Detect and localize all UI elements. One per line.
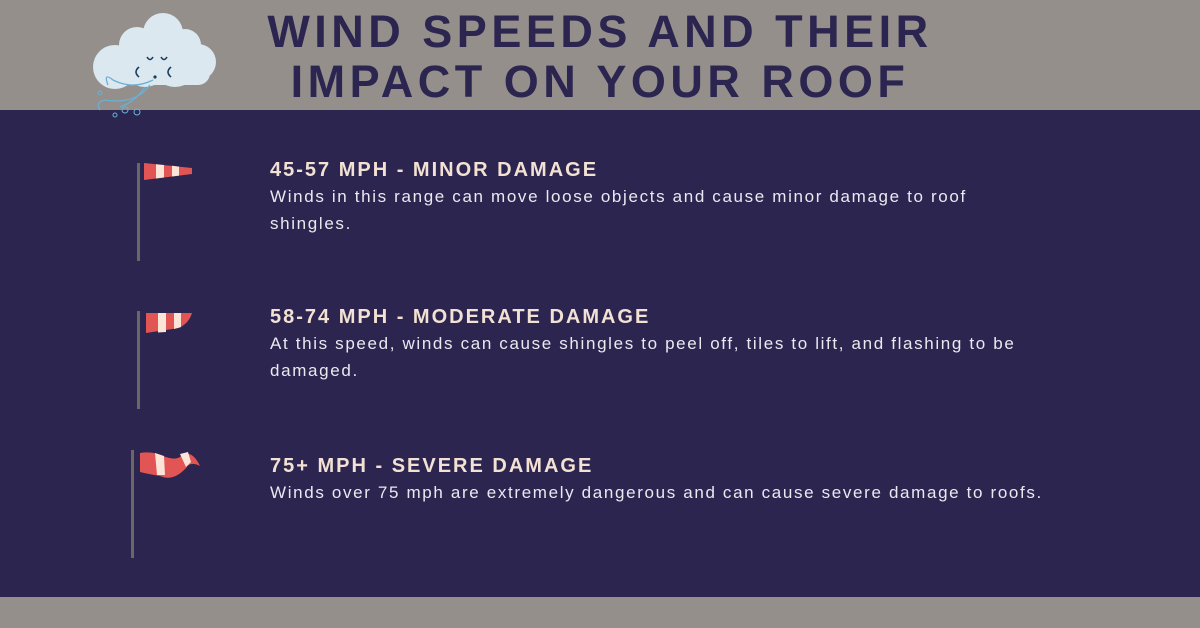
text block: moderate damage	[270, 306, 1015, 380]
text block: severe damage	[270, 455, 1043, 502]
title	[267, 6, 933, 107]
text block: minor damage	[270, 159, 967, 233]
text block: minor damage: Winds in this range can move loose objects and cause minor damage to roof	[270, 187, 967, 206]
text block: moderate damage: damaged.	[270, 361, 359, 380]
text block: minor damage: shingles.	[270, 214, 352, 233]
text block: severe damage: 75+ MPH - SEVERE DAMAGE	[270, 455, 593, 477]
text block: severe damage: Winds over 75 mph are extremely dangerous and can cause severe damage to roofs.	[270, 483, 1043, 502]
icon: windsock 3	[131, 450, 200, 558]
icon: windsock 2	[137, 311, 192, 409]
text block: moderate damage: At this speed, winds can cause shingles to peel off, tiles to lift, and flashing to be	[270, 334, 1015, 353]
header band: dark navy panel	[0, 110, 1200, 597]
title: IMPACT ON YOUR ROOF	[291, 56, 909, 107]
icon: wind cloud	[93, 13, 216, 118]
title: WIND SPEEDS AND THEIR	[267, 6, 933, 57]
icon: windsock 1	[137, 163, 192, 261]
text block: minor damage: 45-57 MPH - MINOR DAMAGE	[270, 159, 598, 181]
text block: moderate damage: 58-74 MPH - MODERATE DAMAGE	[270, 306, 650, 328]
